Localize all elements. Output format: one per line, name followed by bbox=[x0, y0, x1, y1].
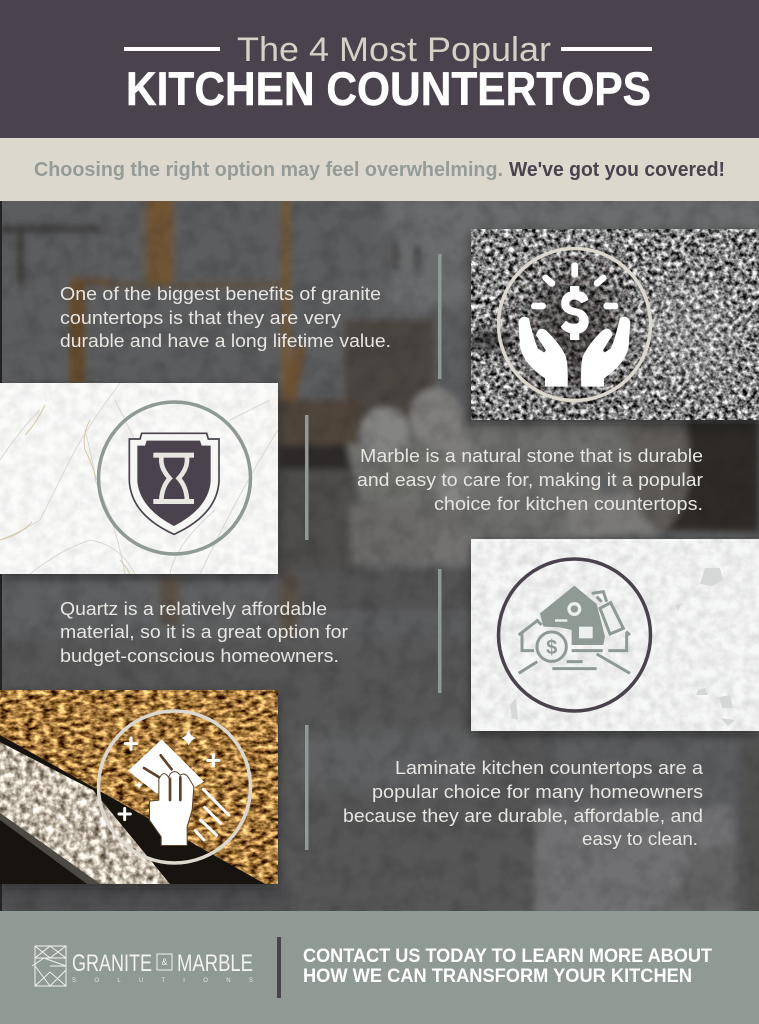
text block: granite: countertops is that they are very bbox=[60, 307, 342, 328]
panel: granite image with icon bbox=[468, 229, 759, 424]
divider: laminate bbox=[305, 725, 308, 850]
logo mark bbox=[32, 946, 66, 986]
panel: brown granite image with icon bbox=[0, 690, 278, 888]
text block: laminate bbox=[343, 757, 704, 849]
icon: hand wiping with cloth bbox=[98, 711, 250, 863]
title line one: The 4 Most Popular bbox=[237, 31, 551, 69]
panel: marble image with icon bbox=[0, 383, 278, 578]
subtitle dark text: We've got you covered! bbox=[509, 159, 725, 181]
logo text: MARBLE bbox=[177, 950, 253, 977]
call to action: HOW WE CAN TRANSFORM YOUR KITCHEN bbox=[303, 966, 692, 987]
mixing bowls and eggs bbox=[342, 440, 461, 506]
text block: quartz: Quartz is a relatively affordable bbox=[60, 598, 327, 619]
icon: house with price tag and coin: $ bbox=[546, 637, 557, 659]
subtitle grey text: Choosing the right option may feel overwhelming. bbox=[34, 159, 503, 181]
icon: hands holding dollar bbox=[498, 248, 650, 400]
footer divider bbox=[277, 937, 281, 998]
header band bbox=[0, 0, 759, 138]
panel: quartz image with icon bbox=[471, 539, 759, 735]
logo ampersand box: & bbox=[161, 957, 168, 967]
text block: granite: One of the biggest benefits of granite bbox=[60, 283, 381, 304]
logo text: GRANITE bbox=[72, 950, 152, 977]
divider: quartz bbox=[438, 569, 442, 693]
background: blurred kitchen photo bbox=[0, 195, 759, 920]
text block: marble bbox=[357, 445, 703, 514]
title rule left bbox=[124, 47, 220, 51]
logo ampersand box bbox=[157, 954, 172, 970]
text block: marble: choice for kitchen countertops. bbox=[434, 493, 703, 514]
text block: laminate: easy to clean. bbox=[582, 828, 698, 849]
text block: granite: durable and have a long lifetime value. bbox=[60, 330, 391, 351]
text block: quartz bbox=[60, 598, 348, 666]
reflected cup bbox=[535, 806, 735, 916]
text block: quartz: material, so it is a great option for bbox=[60, 621, 348, 642]
footer band bbox=[0, 911, 759, 1024]
icon: house with price tag and coin bbox=[498, 559, 650, 711]
text block: laminate: popular choice for many homeowners bbox=[372, 781, 703, 802]
logo tagline: S O L U T I O N S bbox=[72, 978, 253, 984]
text block: granite bbox=[60, 283, 391, 351]
title line two: KITCHEN COUNTERTOPS bbox=[126, 62, 651, 115]
text block: laminate: Laminate kitchen countertops are a bbox=[395, 757, 704, 778]
text block: marble: and easy to care for, making it a popular bbox=[357, 469, 703, 490]
divider: marble bbox=[305, 415, 308, 540]
text block: marble: Marble is a natural stone that is durable bbox=[360, 445, 703, 466]
divider: granite bbox=[438, 254, 442, 379]
call to action bbox=[303, 946, 712, 987]
subtitle band bbox=[0, 138, 759, 201]
title rule right bbox=[561, 47, 652, 51]
text block: quartz: budget-conscious homeowners. bbox=[60, 645, 339, 666]
icon: shield with hourglass bbox=[98, 402, 250, 554]
text block: laminate: because they are durable, affordable, and bbox=[343, 805, 703, 826]
call to action: CONTACT US TODAY TO LEARN MORE ABOUT bbox=[303, 946, 712, 967]
